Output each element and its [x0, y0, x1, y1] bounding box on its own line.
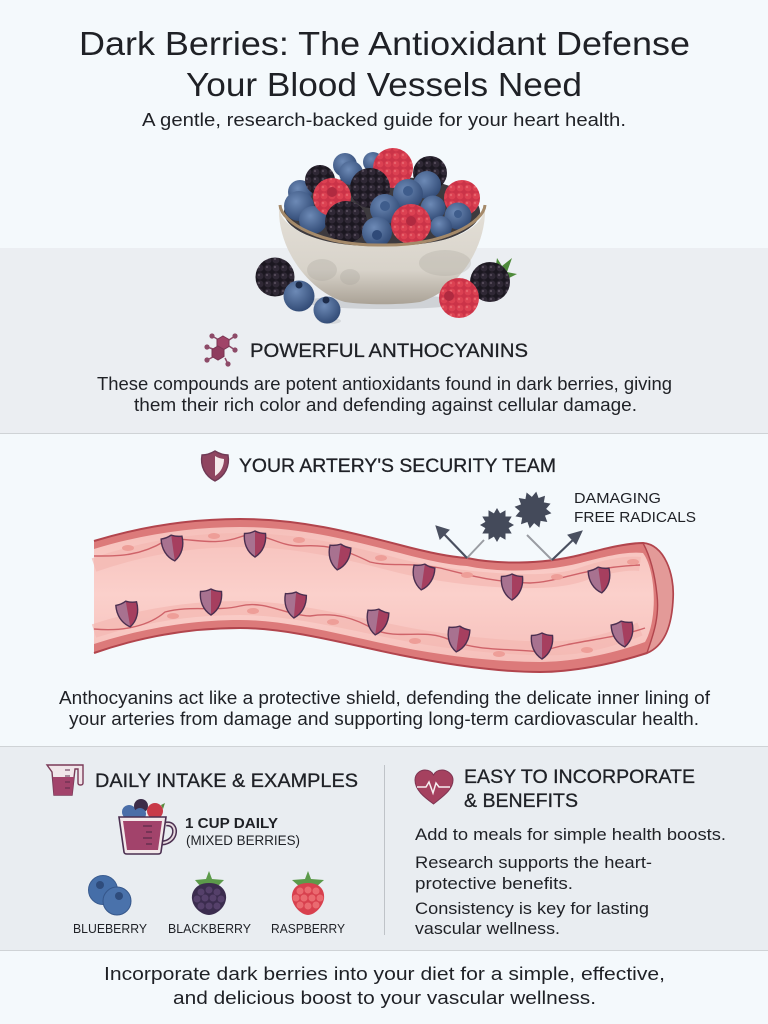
example: raspberry	[271, 871, 346, 936]
wavy endothelium lines	[94, 535, 640, 583]
panel: daily intake background band	[0, 747, 768, 950]
panel: easy to incorporate and benefits	[415, 767, 726, 938]
bowl of berries photo illustration	[256, 148, 517, 324]
free radical particles	[480, 488, 555, 542]
inner lining bands	[94, 540, 640, 581]
benefit: consistency: vascular wellness.	[415, 919, 560, 938]
bowl shadow	[305, 295, 465, 309]
bowl rim	[280, 205, 485, 245]
icon: shield	[202, 451, 228, 481]
endothelial cells	[122, 533, 639, 657]
callout: 1 cup daily: 1 CUP DAILY	[185, 815, 278, 832]
footer call to action	[104, 964, 665, 1008]
benefit: simple health boosts: Add to meals for simple health boosts.	[415, 825, 726, 844]
heading: YOUR ARTERY'S SECURITY TEAM	[239, 456, 556, 477]
heading: & BENEFITS	[464, 791, 578, 812]
example: raspberry: RASPBERRY	[271, 922, 346, 936]
loose berries	[256, 258, 517, 324]
heading: POWERFUL ANTHOCYANINS	[250, 341, 528, 362]
icon: heart with pulse	[415, 770, 453, 804]
benefit: heart-protective research	[415, 853, 652, 893]
body text	[97, 374, 672, 415]
callout: 1 cup daily: (MIXED BERRIES)	[186, 833, 300, 848]
bowl inside	[284, 176, 480, 248]
footer call to action: and delicious boost to your vascular wellness.	[173, 988, 596, 1008]
example: blueberry: BLUEBERRY	[73, 922, 148, 936]
benefit: heart-protective research: Research supports the heart-	[415, 853, 652, 872]
benefit: consistency: Consistency is key for lasting	[415, 899, 649, 918]
free radicals with deflection arrows	[436, 488, 696, 560]
body text: These compounds are potent antioxidants found in dark berries, giving	[97, 374, 672, 394]
body text: them their rich color and defending against cellular damage.	[134, 395, 637, 415]
example: blackberry: BLACKBERRY	[168, 922, 252, 936]
berries in bowl	[284, 148, 480, 247]
title: Dark Berries: The Antioxidant Defense	[79, 25, 690, 62]
bowl body	[279, 206, 485, 304]
icon: cup of mixed berries	[119, 799, 175, 854]
artery explanation text	[59, 688, 711, 729]
label: damaging free radicals	[574, 490, 696, 526]
example: blackberry	[168, 871, 252, 936]
callout: 1 cup daily	[185, 815, 300, 848]
panel: daily intake and examples	[47, 765, 358, 936]
bowl glaze marks	[307, 250, 471, 285]
artery wall	[94, 519, 673, 672]
section: artery's security team heading	[202, 451, 556, 481]
deflection arrows	[436, 526, 582, 560]
artery open end	[643, 543, 673, 653]
heading	[464, 767, 695, 812]
icon: molecule	[204, 333, 238, 367]
title: Your Blood Vessels Need	[186, 66, 582, 103]
example: blueberry	[73, 876, 148, 936]
artery lumen	[94, 527, 654, 662]
benefit: consistency	[415, 899, 649, 938]
title	[79, 25, 690, 103]
protective shields	[115, 531, 635, 659]
icon: measuring jug	[47, 765, 83, 795]
benefit: heart-protective research: protective benefits.	[415, 874, 573, 893]
label: damaging free radicals: FREE RADICALS	[574, 509, 696, 526]
footer call to action: Incorporate dark berries into your diet for a simple, effective,	[104, 964, 665, 984]
artery diagram	[94, 519, 673, 672]
incoming paths	[467, 535, 552, 560]
section: powerful anthocyanins	[97, 333, 672, 415]
artery explanation text: Anthocyanins act like a protective shield, defending the delicate inner lining of	[59, 688, 711, 708]
label: damaging free radicals: DAMAGING	[574, 490, 661, 507]
subtitle: A gentle, research-backed guide for your heart health.	[142, 110, 626, 130]
artery explanation text: your arteries from damage and supporting long-term cardiovascular health.	[69, 709, 699, 729]
heading: EASY TO INCORPORATE	[464, 767, 695, 788]
heading: DAILY INTAKE & EXAMPLES	[95, 771, 358, 792]
panel: anthocyanins background band	[0, 248, 768, 433]
